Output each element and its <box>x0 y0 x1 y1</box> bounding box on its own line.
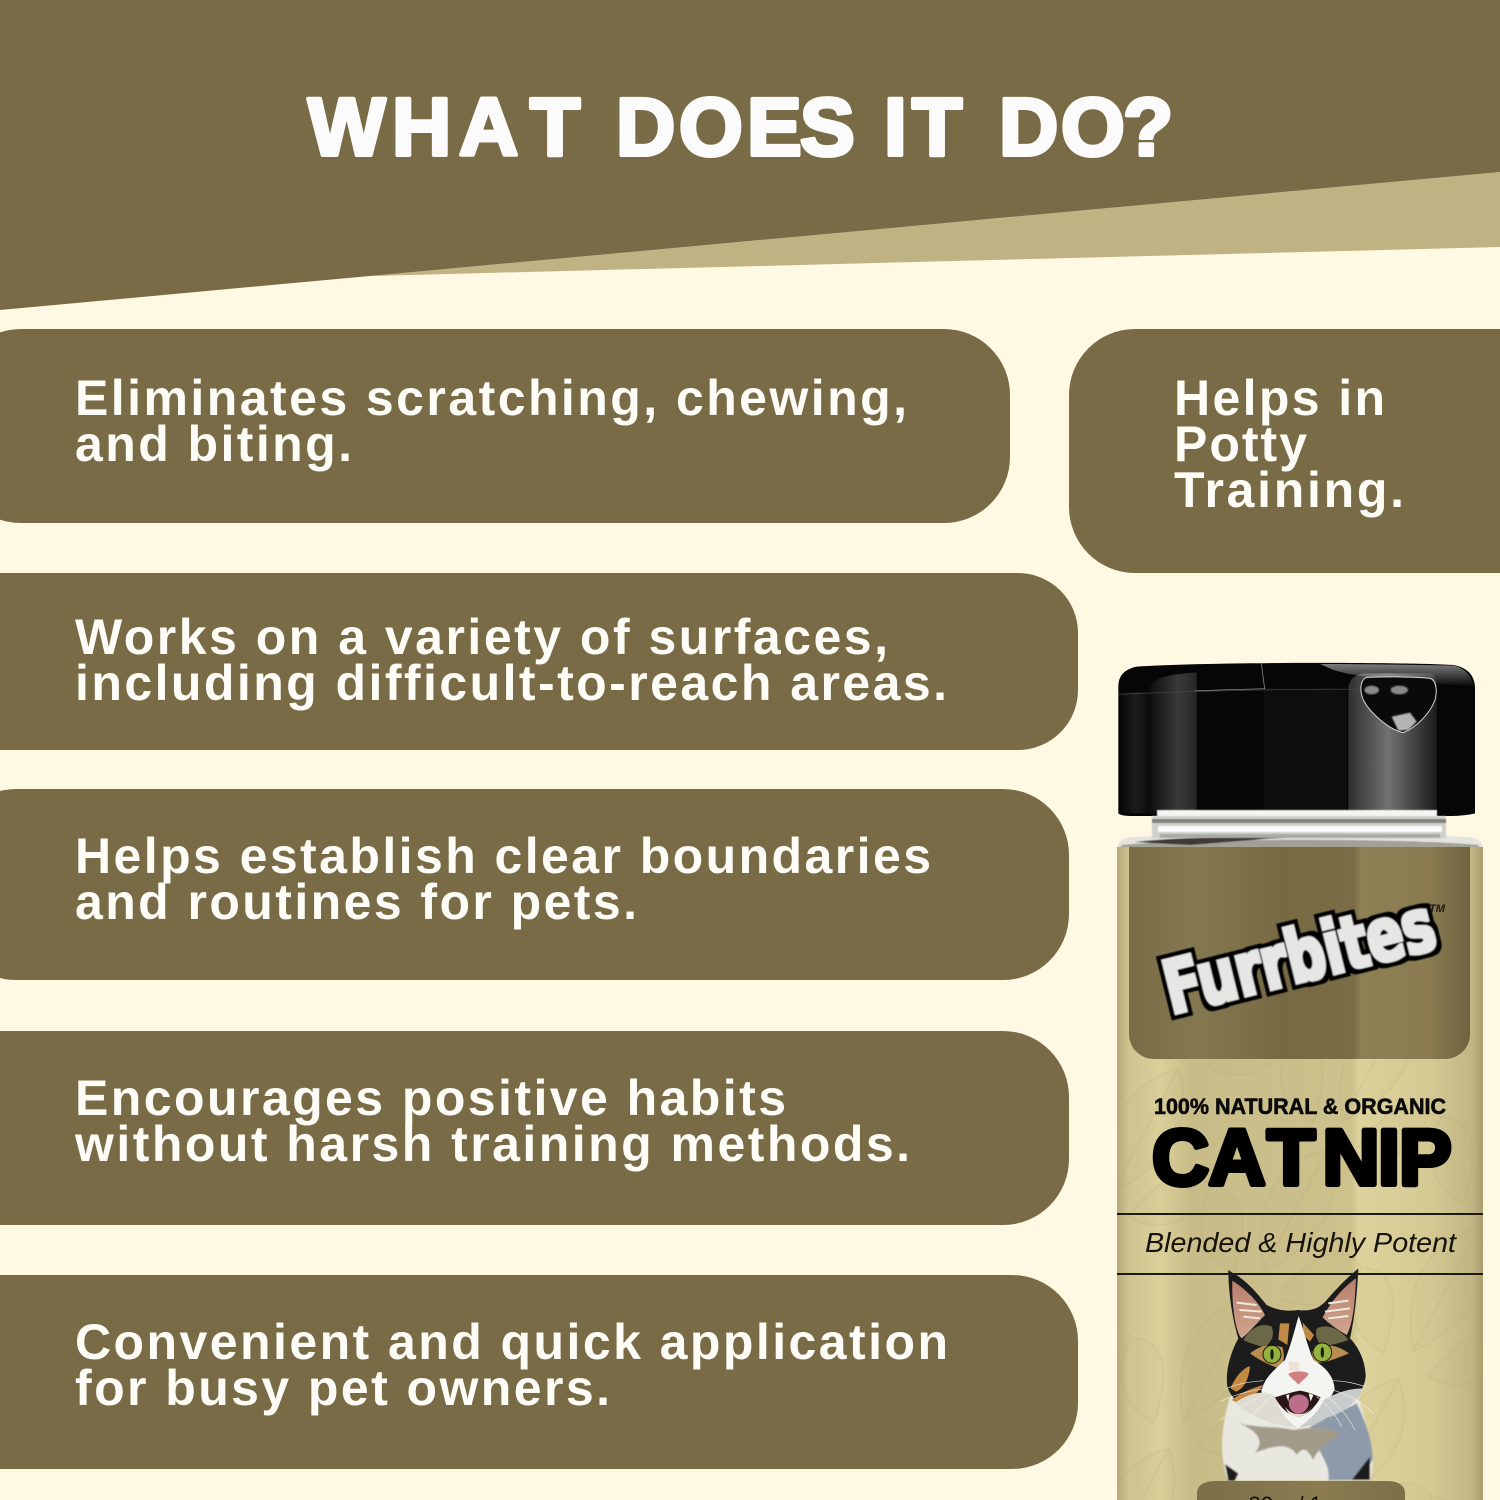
header banner <box>0 0 1500 310</box>
panel: potty training <box>1069 329 1500 573</box>
cat body <box>1222 1393 1373 1481</box>
panel: positive habits: without harsh training methods. <box>74 1116 910 1172</box>
panel: convenient application: Convenient and quick application <box>75 1314 948 1370</box>
label product name: CATNIP <box>1152 1112 1452 1202</box>
panel: eliminates scratching: and biting. <box>75 416 352 472</box>
trademark: TM <box>1429 903 1446 915</box>
panel: positive habits: Encourages positive habits <box>75 1070 786 1126</box>
jar label <box>1117 847 1483 1500</box>
label subheading: 100% NATURAL & ORGANIC <box>1154 1094 1446 1119</box>
panel: eliminates scratching <box>0 329 1010 523</box>
panel: eliminates scratching: Eliminates scratching, chewing, <box>75 370 907 426</box>
jar neck <box>1152 810 1446 838</box>
panel: boundaries and routines: and routines for pets. <box>75 874 637 930</box>
panel: convenient application <box>0 1275 1078 1469</box>
label tagline: Blended & Highly Potent <box>1145 1227 1457 1258</box>
panel: potty training: Helps in <box>1174 370 1385 426</box>
panel: potty training: Training. <box>1174 462 1404 518</box>
panel: variety of surfaces: including difficult-to-reach areas. <box>75 655 947 711</box>
panel: positive habits <box>0 1031 1069 1225</box>
title: WHAT DOES IT DO? <box>308 82 1173 173</box>
panel: boundaries and routines: Helps establish clear boundaries <box>75 828 931 884</box>
panel: convenient application: for busy pet owners. <box>75 1360 610 1416</box>
header tan wedge <box>370 172 1500 276</box>
cat ears <box>1232 1281 1265 1338</box>
net weight tag <box>1197 1481 1405 1500</box>
spout opening <box>1361 677 1436 733</box>
panel: boundaries and routines <box>0 789 1069 980</box>
product jar <box>1117 663 1483 1500</box>
cat forehead patches <box>1243 1325 1273 1347</box>
cat eyes <box>1263 1343 1332 1363</box>
icon: calico cat <box>1220 1268 1373 1481</box>
cat blaze and muzzle <box>1261 1316 1335 1428</box>
cat nose <box>1288 1371 1309 1385</box>
brand panel <box>1129 847 1470 1059</box>
panel: potty training: Potty <box>1174 416 1307 472</box>
cap <box>1118 663 1475 816</box>
panel: variety of surfaces <box>0 573 1078 750</box>
cat mouth <box>1275 1391 1321 1417</box>
cat whiskers <box>1220 1381 1373 1430</box>
panel: variety of surfaces: Works on a variety of surfaces, <box>75 609 888 665</box>
cat head <box>1227 1268 1366 1428</box>
label rule bottom <box>1117 1273 1483 1275</box>
label rule top <box>1117 1213 1483 1215</box>
jar shoulder <box>1117 834 1483 850</box>
